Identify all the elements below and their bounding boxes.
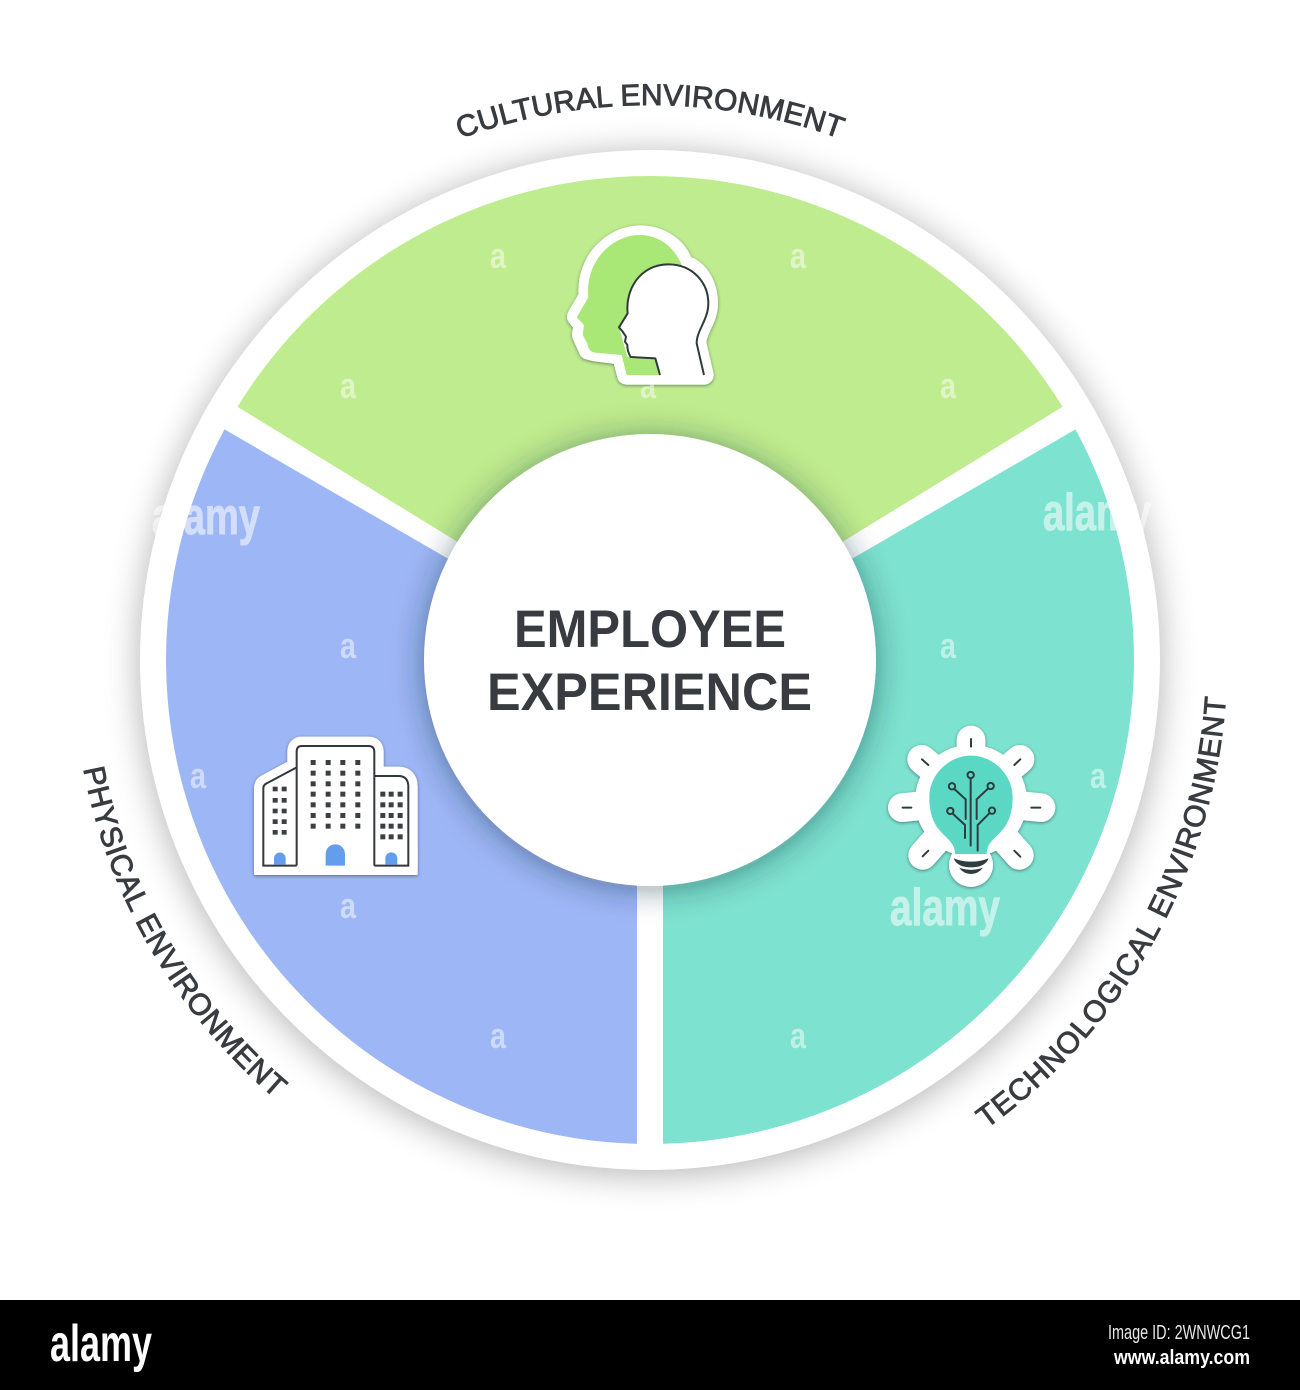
center title: EXPERIENCE: [487, 663, 812, 722]
watermark letters: a: [940, 365, 957, 406]
watermark letters: [190, 235, 1107, 1056]
watermark letters: a: [490, 1015, 507, 1056]
segment: technological environment: [663, 429, 1134, 1144]
footer logo: alamy: [50, 1315, 152, 1373]
label: cultural environment: CULTURAL ENVIRONMENT: [457, 84, 846, 136]
segment: cultural environment: [238, 176, 1062, 660]
watermark letters: a: [1090, 755, 1107, 796]
footer bar: [0, 1300, 1300, 1390]
watermark letters: a: [790, 235, 807, 276]
watermark letters: a: [340, 365, 357, 406]
icon: two heads: [577, 235, 708, 375]
outer white ring: [138, 150, 1162, 1176]
center title: EMPLOYEE: [514, 600, 786, 659]
watermark letters: a: [940, 625, 957, 666]
footer url: www.alamy.com: [1113, 1347, 1250, 1369]
watermark words: alamy: [1043, 484, 1151, 542]
label: physical environment: PHYSICAL ENVIRONMENT: [83, 766, 289, 1094]
watermark letters: a: [640, 365, 657, 406]
watermark letters: a: [340, 625, 357, 666]
watermark letters: a: [790, 1015, 807, 1056]
label: technological environment: TECHNOLOGICAL ENVIRONMENT: [974, 696, 1226, 1125]
watermark letters: a: [190, 755, 207, 796]
bulb glass: [929, 756, 1013, 854]
watermark words: [152, 484, 1151, 937]
center circle: [424, 434, 876, 886]
watermark words: alamy: [890, 879, 1000, 937]
circuit lines and rays: [903, 739, 1040, 857]
footer image id: Image ID: 2WNWCG1: [1108, 1322, 1250, 1344]
watermark letters: a: [340, 885, 357, 926]
center title: [487, 600, 812, 722]
icon: office buildings: [254, 746, 418, 875]
watermark words: alamy: [152, 488, 260, 546]
watermark letters: a: [490, 235, 507, 276]
bulb base: [954, 858, 989, 867]
icon: light bulb with circuit: [902, 739, 1041, 887]
segment: physical environment: [166, 429, 637, 1144]
